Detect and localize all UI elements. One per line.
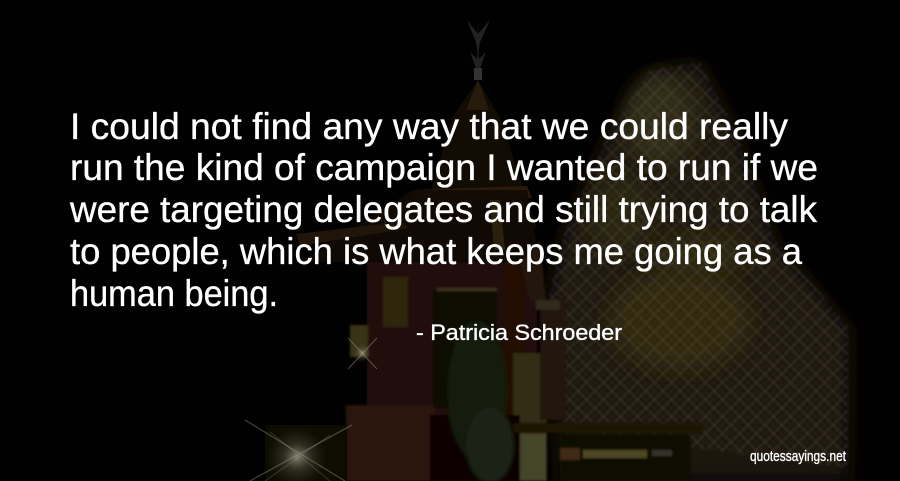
icon: small star sparkle (348, 338, 377, 369)
quote text: I could not find any way that we could really (70, 106, 788, 147)
watermark: quotessayings.net (750, 448, 847, 465)
photo: shopfront and sign (513, 423, 703, 481)
photo: church tower and roof (296, 20, 540, 262)
quote text: were targeting delegates and still trying to talk (69, 189, 817, 230)
quote text: human being. (70, 273, 278, 314)
icon: large star sparkle (245, 420, 352, 481)
photo: lit tree with lattice of lights (548, 62, 850, 481)
quote text: run the kind of campaign I wanted to run if we (70, 147, 818, 188)
attribution: - Patricia Schroeder (416, 320, 622, 345)
quote text: to people, which is what keeps me going as a (70, 231, 802, 272)
photo: dark tree at left (215, 300, 345, 481)
photo: building facade (345, 240, 565, 481)
quote text (69, 106, 818, 314)
